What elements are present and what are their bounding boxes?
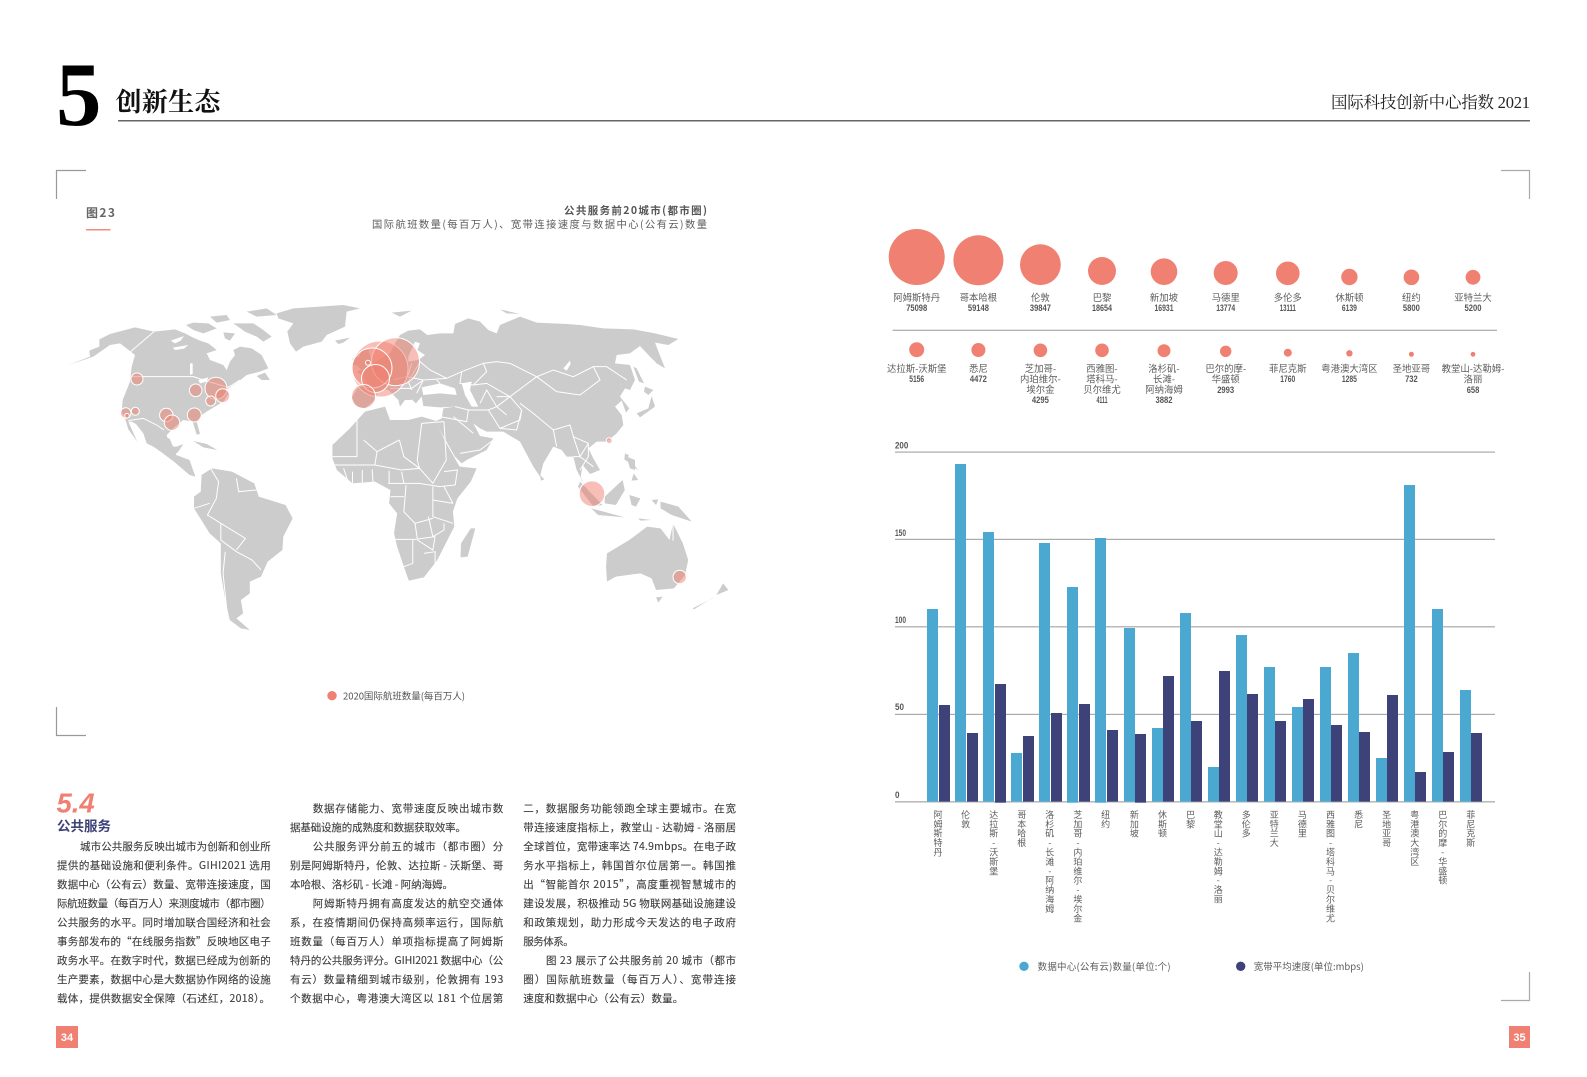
figure number: 图23 [86,204,115,221]
bubble ranking: bottom row: 洛杉矶- [1148,361,1180,375]
city axis labels: 悉尼 [1352,809,1365,829]
frame corners [56,170,1530,1000]
bubble ranking: top row: 59148 [968,303,989,313]
city axis labels: 巴尔的摩-华盛顿 [1436,810,1449,886]
text column 3: 二，数据服务功能领跑全球主要城市。在宽 [523,801,736,816]
chapter title: 创新生态 [116,82,222,119]
figure number [86,204,115,230]
section heading: 公共服务 [57,815,112,835]
bar chart [895,440,1495,923]
bubble ranking: bottom row: 内珀维尔- [1020,372,1061,386]
text column 3: 务水平指标上，韩国首尔位居第一。韩国推 [523,858,736,873]
text column 1: 生产要素，数据中心是大数据协作网络的设施 [57,972,271,987]
land: north america and greenland [68,305,360,457]
city axis labels: 多伦多 [1240,809,1253,839]
bubble ranking: bottom row: 西雅图- [1086,361,1118,375]
bubble ranking: top row: 13774 [1216,303,1235,313]
text column 3 [523,801,736,1006]
bubble ranking: top row: 5800 [1403,303,1420,313]
text column 1: 数据中心（公有云）数量、宽带连接速度，国 [57,877,271,892]
section heading: 5.4 [56,788,95,818]
city axis labels: 菲尼克斯 [1464,809,1477,848]
bubble ranking: top row: 哥本哈根 [960,290,998,304]
bubble ranking: bottom row: 5156 [909,374,924,384]
bubble ranking: bottom row: 658 [1467,385,1479,395]
bubble ranking: top row: 新加坡 [1150,290,1179,304]
land: eurasia [352,309,678,487]
chart grid and axis labels: 50 [895,702,904,713]
text column 1: 公共服务的水平。同时增加联合国经济和社会 [57,915,271,930]
bubble ranking: bottom row: 芝加哥- [1025,361,1056,375]
page number 34 [56,1026,78,1048]
city axis labels: 粤港澳大湾区 [1408,809,1421,866]
text column 3: 出“智能首尔 2015”，高度重视智慧城市的 [523,877,736,892]
bubbles: asia and australia [579,438,686,584]
text column 2 [290,801,504,1006]
figure title: 国际航班数量(每百万人)、宽带连接速度与数据中心(公有云)数量 [372,216,707,231]
figure title [372,203,707,231]
chapter header [56,44,1530,145]
city axis labels: 教堂山-达勒姆-洛丽 [1212,809,1225,905]
world map [68,305,728,630]
text column 1: 际航班数量（每百万人）来测度城市（都市圈） [57,896,271,911]
report title: 国际科技创新中心指数 2021 [1331,93,1530,112]
city axis labels: 芝加哥-内珀维尔-埃尔金 [1071,809,1084,923]
bubble ranking: bottom row: 4472 [970,374,987,384]
chart grid and axis labels [895,440,1495,803]
text column 3: 带连接速度指标上，教堂山 - 达勒姆 - 洛丽居 [523,820,736,835]
bubble ranking: bottom row: 洛丽 [1464,372,1482,386]
city axis labels: 马德里 [1296,810,1309,838]
figure title: 公共服务前20城市(都市圈) [564,203,707,218]
bubble ranking: bottom row: 3882 [1156,395,1172,405]
bubble ranking: top row: 多伦多 [1274,290,1302,304]
text column 2: 系，在疫情期间仍保持高频率运行，国际航 [290,915,504,930]
text column 2: 个数据中心，粤港澳大湾区以 181 个位居第 [290,991,503,1006]
bubble ranking: bottom row: 2993 [1217,385,1234,395]
bar chart legend: 宽带平均速度(单位:mbps) [1254,959,1364,973]
bubble ranking: top row: 5200 [1464,303,1482,313]
city axis labels: 巴黎 [1184,810,1197,829]
text column 2: 据基础设施的成熟度和数据获取效率。 [290,820,466,835]
text column 2: 别是阿姆斯特丹，伦敦、达拉斯 - 沃斯堡、哥 [290,858,503,873]
bubble ranking: bottom row: 1760 [1280,374,1295,384]
bubble ranking: bottom row [887,342,1504,405]
text column 3: 服务体系。 [523,934,574,949]
text column 2: 有云）数量精细到城市级别，伦敦拥有 193 [290,972,503,987]
bubble ranking: bottom row: 塔科马- [1086,372,1118,386]
city axis labels: 伦敦 [959,809,972,829]
page number 35 [1509,1026,1530,1048]
text column 1: 载体，提供数据安全保障（石述红，2018）。 [57,991,270,1006]
city axis labels: 圣地亚哥 [1380,810,1393,848]
text column 2: 特丹的公共服务评分。GIHI2021 数据中心（公 [290,953,504,968]
city axis labels: 新加坡 [1128,809,1141,839]
text column 1: 提供的基础设施和便利条件。GIHI2021 选用 [57,858,271,873]
bubble ranking: bottom row: 悉尼 [969,361,988,375]
chart grid and axis labels: 100 [895,615,906,626]
city axis labels: 阿姆斯特丹 [932,810,944,858]
city axis labels [932,809,1477,923]
bubble ranking: bottom row: 圣地亚哥 [1393,361,1430,375]
text column 3: 建设发展，积极推动 5G 物联网基础设施建设 [523,896,736,911]
bubble ranking: top row: 16931 [1154,303,1174,313]
bubble ranking: bottom row: 巴尔的摩- [1205,361,1246,375]
text column 2: 公共服务评分前五的城市（都市圈）分 [313,839,504,854]
page number 34: 34 [61,1032,74,1044]
text column 3: 全球首位，宽带速率达 74.9mbps。在电子政 [523,839,736,854]
bubble ranking: bottom row: 教堂山-达勒姆- [1442,361,1504,375]
bubble ranking: top row: 巴黎 [1093,290,1112,304]
text column 2: 班数量（每百万人）单项指标提高了阿姆斯 [290,934,504,949]
chapter number: 5 [56,44,102,145]
bubble ranking: bottom row: 阿纳海姆 [1145,382,1183,396]
bubble ranking: top row: 13111 [1280,303,1296,313]
bubble ranking: top row: 亚特兰大 [1454,290,1492,304]
text column 2: 阿姆斯特丹拥有高度发达的航空交通体 [313,896,504,911]
bubble ranking: top row: 马德里 [1212,290,1240,304]
bars: last ten cities [1208,485,1482,802]
bubble ranking: top row: 休斯顿 [1335,290,1363,304]
bubble ranking: top row: 75098 [906,303,927,313]
bubble ranking: top row: 伦敦 [1031,290,1050,304]
text column 1: 城市公共服务反映出城市为创新和创业所 [80,839,271,854]
text column 3: 和政策规划，助力形成今天发达的电子政府 [523,915,736,930]
city axis labels: 西雅图-塔科马-贝尔维尤 [1324,810,1337,923]
chart grid and axis labels: 0 [895,790,900,801]
bubble ranking: top row: 39847 [1030,303,1051,313]
page number 35: 35 [1513,1032,1526,1044]
text column 2: 本哈根、洛杉矶 - 长滩 - 阿纳海姆。 [290,877,453,892]
text column 1 [57,839,271,1006]
bar chart legend: 数据中心(公有云)数量(单位:个) [1038,959,1171,973]
text column 3: 速度和数据中心（公有云）数量。 [523,991,683,1006]
bubble ranking: bottom row: 贝尔维尤 [1083,382,1121,396]
bubble ranking: top row: 阿姆斯特丹 [893,290,940,304]
bubble ranking: bottom row: 粤港澳大湾区 [1321,361,1378,375]
bar chart legend [1019,959,1364,973]
bubble ranking: top row: 6139 [1342,303,1357,313]
bubbles: europe [352,338,420,408]
bubble ranking: bottom row: 4111 [1096,395,1108,405]
section heading [56,788,112,835]
text column 1: 政务水平。在数字时代，数据已经成为创新的 [57,953,271,968]
chart grid and axis labels: 150 [895,528,906,539]
text column 2: 数据存储能力、宽带速度反映出城市数 [313,801,504,816]
text column 3: 图 23 展示了公共服务前 20 城市（都市 [546,953,736,968]
bubble ranking: bottom row: 菲尼克斯 [1269,361,1307,375]
bubble ranking: bottom row: 1285 [1342,374,1357,384]
text column 1: 事务部发布的“在线服务指数”反映地区电子 [57,934,271,949]
bubble ranking: bottom row: 长滩- [1153,372,1175,386]
city axis labels: 洛杉矶-长滩-阿纳海姆 [1043,809,1056,914]
city axis labels: 达拉斯-沃斯堡 [987,809,1000,876]
bubble ranking: bottom row: 4295 [1032,395,1049,405]
bubble ranking: bottom row: 达拉斯-沃斯堡 [887,361,946,375]
bubbles: north america [120,373,230,430]
city axis labels: 哥本哈根 [1015,810,1028,848]
city axis labels: 纽约 [1099,809,1112,829]
text column 3: 圈）国际航班数量（每百万人）、宽带连接 [523,972,736,987]
bubble ranking: top row: 纽约 [1402,290,1421,304]
bars: first ten cities [927,464,1202,803]
land: southern hemisphere [146,407,728,630]
bubble ranking: top row: 18654 [1092,303,1112,313]
bubble ranking: bottom row: 华盛顿 [1212,372,1240,386]
map legend: 2020国际航班数量(每百万人) [343,688,465,702]
city axis labels: 亚特兰大 [1268,810,1281,848]
chart grid and axis labels: 200 [895,440,908,452]
bubble ranking: bottom row: 732 [1405,374,1418,384]
city axis labels: 休斯顿 [1156,809,1169,839]
bubble ranking: top row [889,229,1492,313]
bubble ranking: bottom row: 埃尔金 [1026,382,1055,396]
